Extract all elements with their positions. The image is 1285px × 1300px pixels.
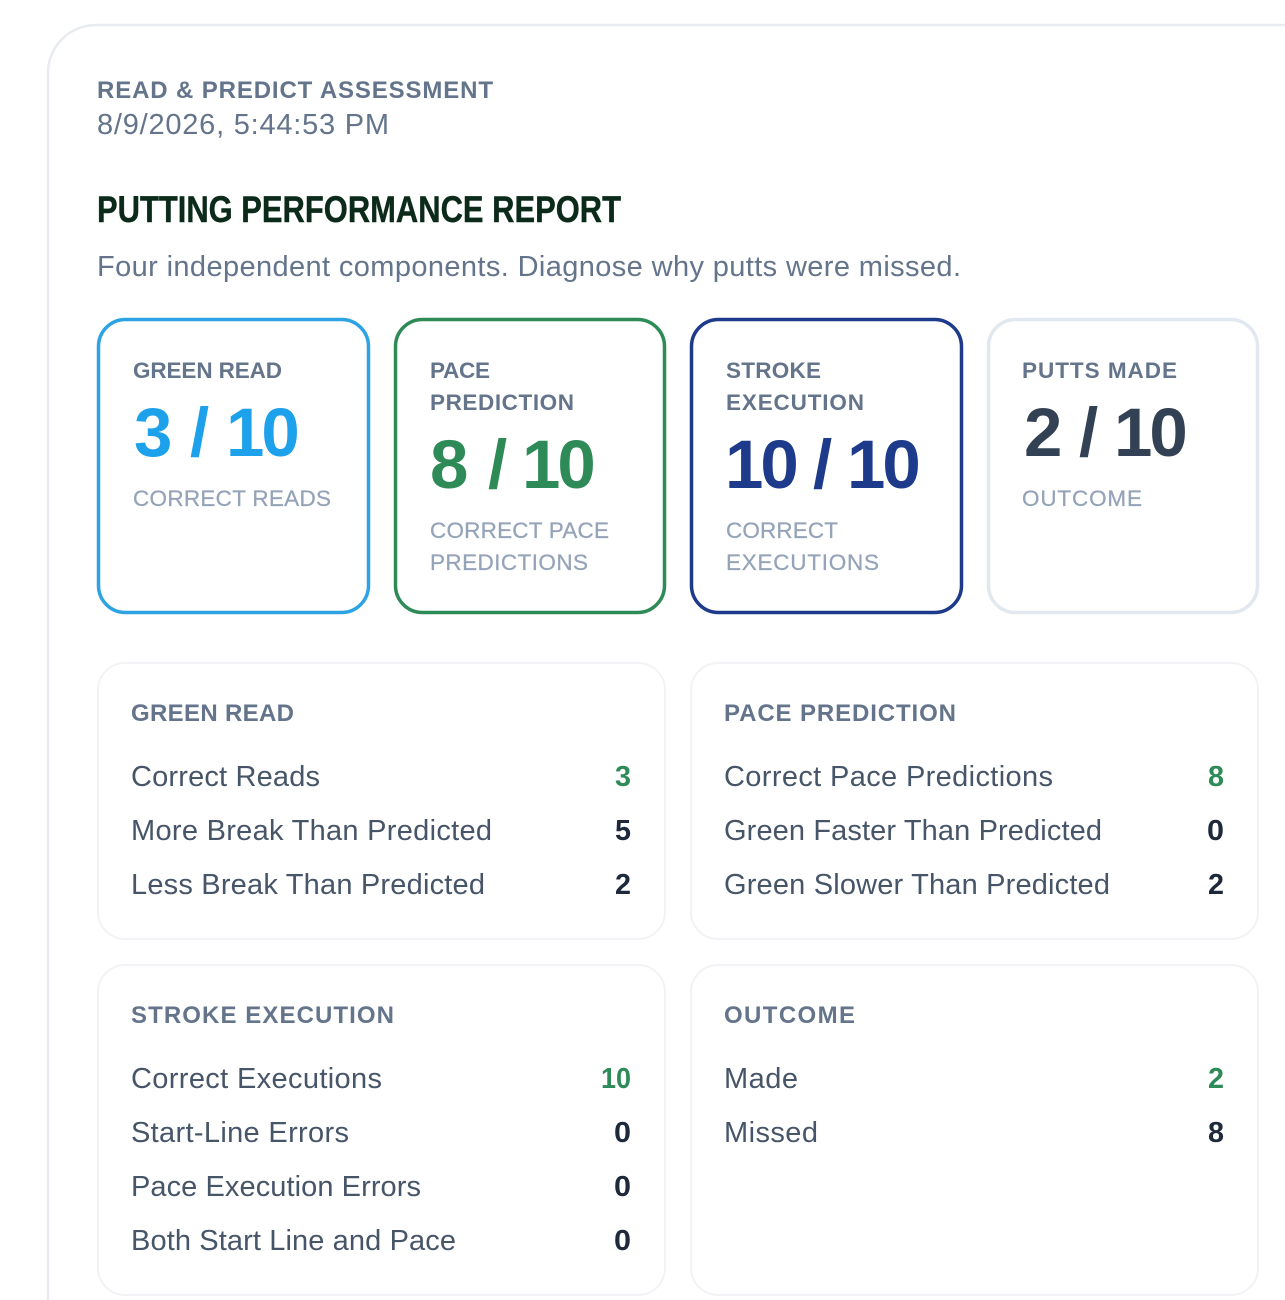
summary card: stroke execution: EXECUTIONS (726, 550, 879, 575)
summary card: pace prediction: 8 (430, 426, 488, 503)
summary card: green read: 3 (134, 394, 192, 471)
detail panel: stroke execution: 10 (601, 1063, 631, 1095)
detail panel: outcome: 2 (1208, 1063, 1224, 1095)
summary card: stroke execution: CORRECT (726, 518, 838, 543)
detail panel: stroke execution: Start-Line Errors (131, 1117, 349, 1149)
summary card: stroke execution: EXECUTION (726, 390, 864, 415)
detail panel: pace prediction: 8 (1208, 761, 1224, 793)
summary card: stroke execution (692, 320, 962, 612)
summary card: green read (98, 320, 368, 612)
summary card: green read: GREEN READ (133, 358, 282, 383)
detail panel: pace prediction: PACE PREDICTION (724, 700, 956, 727)
detail panel: outcome: OUTCOME (724, 1002, 855, 1029)
summary card: stroke execution: 10 (847, 426, 918, 503)
detail panel: pace prediction: 0 (1207, 815, 1224, 847)
timestamp: 8/9/2026, 5:44:53 PM (97, 109, 389, 141)
detail panel: pace prediction: Green Slower Than Predicted (724, 869, 1110, 901)
summary card: pace prediction (396, 320, 664, 612)
summary card: green read: 10 (226, 394, 297, 471)
summary card: stroke execution: 10 (725, 426, 812, 503)
detail panel: stroke execution: 0 (614, 1225, 631, 1257)
title: PUTTING PERFORMANCE REPORT (97, 189, 621, 230)
summary card: pace prediction: PREDICTIONS (430, 550, 588, 575)
detail panel: pace prediction: 2 (1208, 869, 1224, 901)
summary card: putts made (988, 320, 1258, 612)
summary card: putts made: 10 (1114, 394, 1185, 471)
summary card: pace prediction: / (488, 426, 526, 503)
detail panel: outcome: Missed (724, 1117, 818, 1149)
detail panel: outcome: 8 (1208, 1117, 1224, 1149)
detail panel: stroke execution: Both Start Line and Pace (131, 1225, 456, 1257)
detail panel: outcome (691, 965, 1258, 1295)
summary card: pace prediction: PREDICTION (430, 390, 574, 415)
summary card: pace prediction: PACE (430, 358, 490, 383)
detail panel: pace prediction (691, 663, 1258, 939)
detail panel: green read: GREEN READ (131, 700, 294, 727)
detail panel: stroke execution: Pace Execution Errors (131, 1171, 421, 1203)
detail panel: outcome: Made (724, 1063, 798, 1095)
detail panel: green read (98, 663, 665, 939)
detail panel: stroke execution: 0 (614, 1117, 631, 1149)
detail panel: green read: 5 (615, 815, 631, 847)
detail panel: green read: 3 (615, 761, 631, 793)
detail panel: green read: More Break Than Predicted (131, 815, 492, 847)
summary card: putts made: PUTTS MADE (1022, 358, 1177, 383)
summary card: putts made: OUTCOME (1022, 486, 1142, 511)
summary card: putts made: 2 (1024, 394, 1082, 471)
summary card: stroke execution: STROKE (726, 358, 821, 383)
detail panel: green read: 2 (615, 869, 631, 901)
summary card: stroke execution: / (813, 426, 851, 503)
detail panel: stroke execution: 0 (614, 1171, 631, 1203)
detail panel: green read: Correct Reads (131, 761, 320, 793)
detail panel: green read: Less Break Than Predicted (131, 869, 485, 901)
summary card: pace prediction: 10 (522, 426, 593, 503)
summary card: putts made: / (1079, 394, 1117, 471)
detail panel: stroke execution: Correct Executions (131, 1063, 382, 1095)
detail panel: stroke execution: STROKE EXECUTION (131, 1002, 394, 1029)
detail panel: pace prediction: Correct Pace Predictions (724, 761, 1053, 793)
summary card: green read: CORRECT READS (133, 486, 331, 511)
detail panel: stroke execution (98, 965, 665, 1295)
detail panel: pace prediction: Green Faster Than Predicted (724, 815, 1102, 847)
subtitle: Four independent components. Diagnose why putts were missed. (97, 251, 961, 283)
eyebrow: assessment type: READ & PREDICT ASSESSMENT (97, 77, 493, 104)
summary card: green read: / (190, 394, 228, 471)
summary card: pace prediction: CORRECT PACE (430, 518, 609, 543)
